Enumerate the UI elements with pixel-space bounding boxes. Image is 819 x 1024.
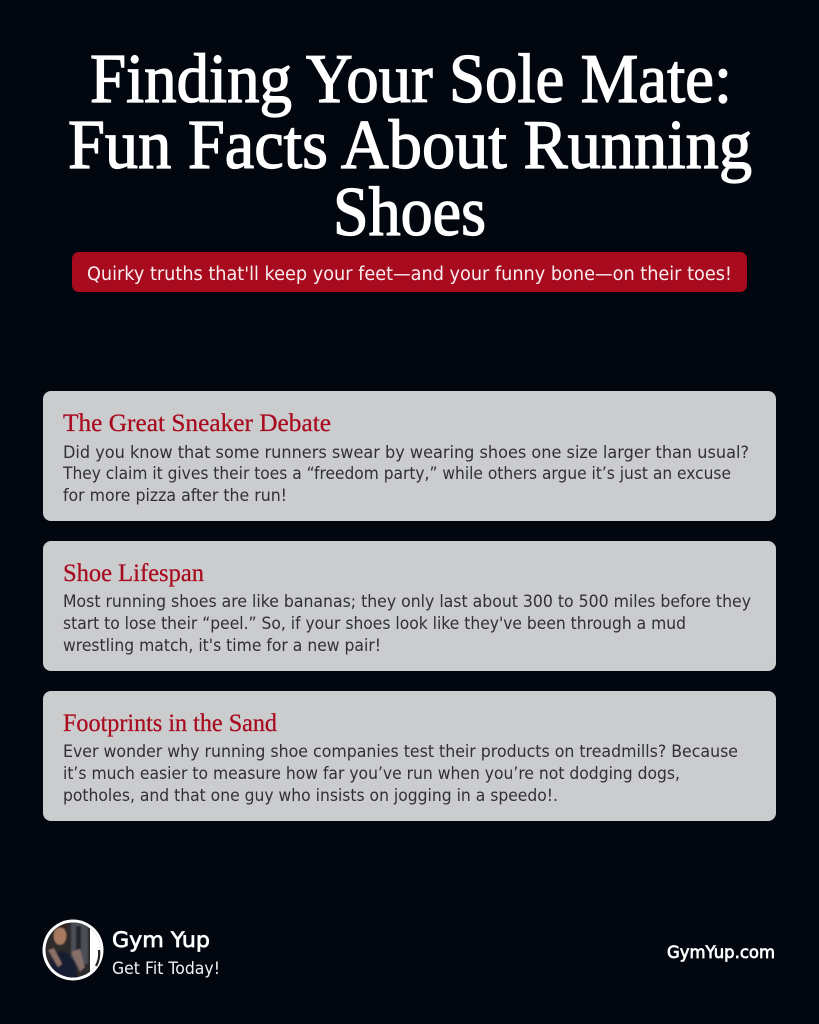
- panel: The Great Sneaker Debate: [43, 391, 776, 521]
- title: Fun Facts About Running: [68, 107, 752, 184]
- text block: shoe lifespan: [63, 592, 751, 655]
- website: GymYup.com: [667, 943, 775, 962]
- tagline: Get Fit Today!: [112, 959, 220, 978]
- text block: footprints: [63, 742, 738, 805]
- text block: footprints: potholes, and that one guy who insists on jogging in a speedo!.: [63, 786, 558, 805]
- heading: Footprints in the Sand: Footprints in the Sand: [63, 710, 277, 737]
- title: Finding Your Sole Mate:: [90, 41, 732, 118]
- text block: shoe lifespan: start to lose their “peel.” So, if your shoes look like they've been through a mud: [63, 614, 686, 633]
- brand name: Gym Yup: [112, 928, 210, 953]
- heading: Shoe Lifespan: Shoe Lifespan: [63, 560, 204, 587]
- title: [68, 41, 752, 251]
- text block: sneaker debate: They claim it gives their toes a “freedom party,” while others argue it’s just an excuse: [62, 464, 731, 483]
- text block: sneaker debate: Did you know that some runners swear by wearing shoes one size larger than usual?: [63, 443, 749, 462]
- subtitle banner: [72, 252, 747, 292]
- title: Shoes: [333, 174, 486, 251]
- text block: sneaker debate: for more pizza after the run!: [63, 486, 287, 505]
- text block: shoe lifespan: wrestling match, it's time for a new pair!: [63, 636, 381, 655]
- panel: Shoe Lifespan: [43, 541, 776, 671]
- text block: footprints: it’s much easier to measure how far you’ve run when you’re not dodging dogs,: [63, 764, 680, 783]
- text block: footprints: Ever wonder why running shoe companies test their products on treadmills? Because: [63, 742, 738, 761]
- heading: The Great Sneaker Debate: The Great Sneaker Debate: [63, 410, 331, 437]
- icon: avatar: [42, 920, 104, 980]
- panel: Footprints in the Sand: [43, 691, 776, 821]
- subtitle banner: Quirky truths that'll keep your feet—and your funny bone—on their toes!: [87, 264, 732, 285]
- text block: sneaker debate: [62, 443, 749, 505]
- text block: shoe lifespan: Most running shoes are like bananas; they only last about 300 to 500 miles before they: [63, 592, 751, 611]
